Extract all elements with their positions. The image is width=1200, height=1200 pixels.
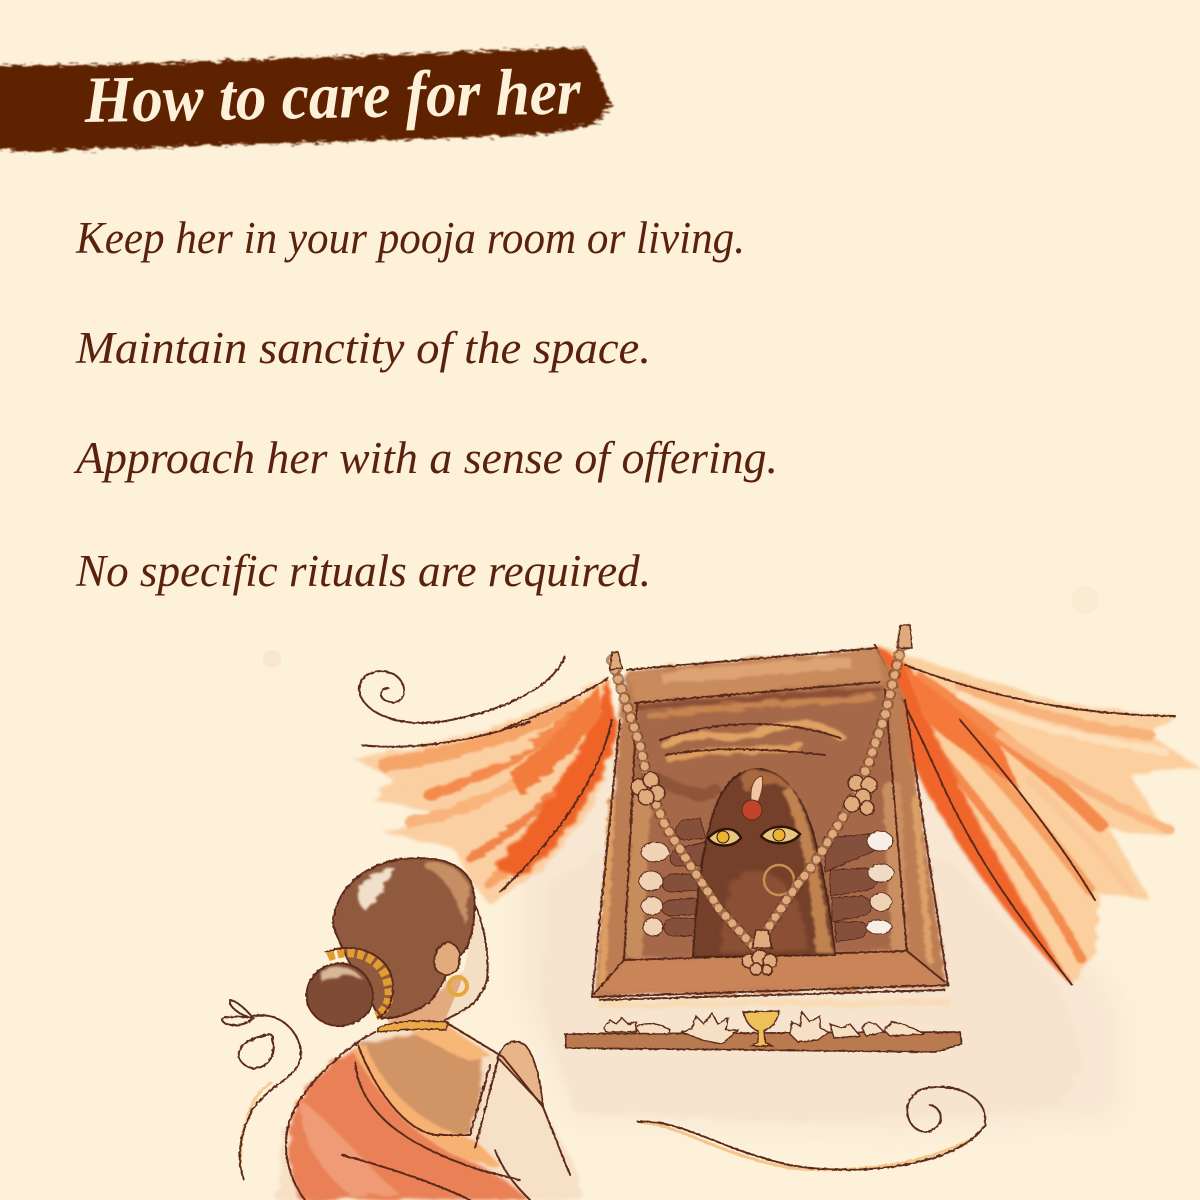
right drape streaks (920, 680, 1170, 960)
blouse and arm base (277, 1023, 580, 1200)
dome side light (782, 785, 832, 952)
left swirl with petals (222, 1000, 301, 1180)
flowers (604, 1012, 925, 1044)
illustration: wall wash (263, 586, 1120, 1135)
wind line (362, 722, 530, 747)
instruction 2: Maintain sanctity of the space. (75, 323, 651, 373)
left hands (639, 818, 706, 936)
frame bottom bar (594, 951, 948, 994)
hair (333, 858, 475, 1018)
flower garland (610, 625, 912, 975)
face outline (445, 905, 488, 1020)
instruction 3: Approach her with a sense of offering. (73, 433, 778, 483)
offering shelf (565, 1011, 962, 1052)
right drape (875, 645, 1200, 985)
earring (449, 977, 467, 995)
instruction 4: No specific rituals are required. (75, 546, 651, 596)
gold chalice (743, 1011, 779, 1046)
right hands (825, 831, 894, 942)
body outline (286, 1023, 570, 1200)
left drape (352, 678, 618, 905)
gold hair ornament (328, 953, 389, 1016)
instruction 1: Keep her in your pooja room or living. (75, 213, 745, 263)
decorative swirls (222, 657, 985, 1180)
wooden shrine frame (592, 648, 948, 1000)
hair highlights (358, 868, 395, 910)
frame outer (594, 648, 948, 997)
sari light band (352, 1043, 500, 1165)
red bindi (742, 800, 762, 820)
bottom swirl (638, 1087, 985, 1170)
frame top bar (627, 649, 884, 703)
deity hands (639, 818, 894, 942)
ear (434, 942, 460, 975)
garland flowers (610, 625, 912, 975)
left eye (708, 829, 741, 846)
deity figure (693, 769, 835, 957)
care instructions (73, 213, 778, 596)
wood grain (602, 690, 930, 985)
praying hands (498, 1042, 543, 1105)
forehead mark (751, 776, 763, 802)
neck skin (385, 965, 487, 1027)
orange sari (289, 1048, 530, 1200)
brush stroke (0, 47, 612, 152)
nose ring (764, 865, 794, 895)
praying woman (277, 858, 580, 1200)
right eye (761, 827, 800, 843)
back skin (360, 1030, 482, 1136)
gold necklace (378, 1021, 448, 1032)
title banner (0, 47, 612, 152)
top swirl (359, 657, 565, 723)
face skin (445, 905, 487, 1020)
hair bun (307, 963, 373, 1026)
face shading (720, 871, 808, 952)
title text: How to care for her (83, 55, 582, 137)
dome silhouette (693, 769, 835, 957)
frame inner recess (625, 684, 907, 960)
left drape streaks (385, 705, 590, 885)
